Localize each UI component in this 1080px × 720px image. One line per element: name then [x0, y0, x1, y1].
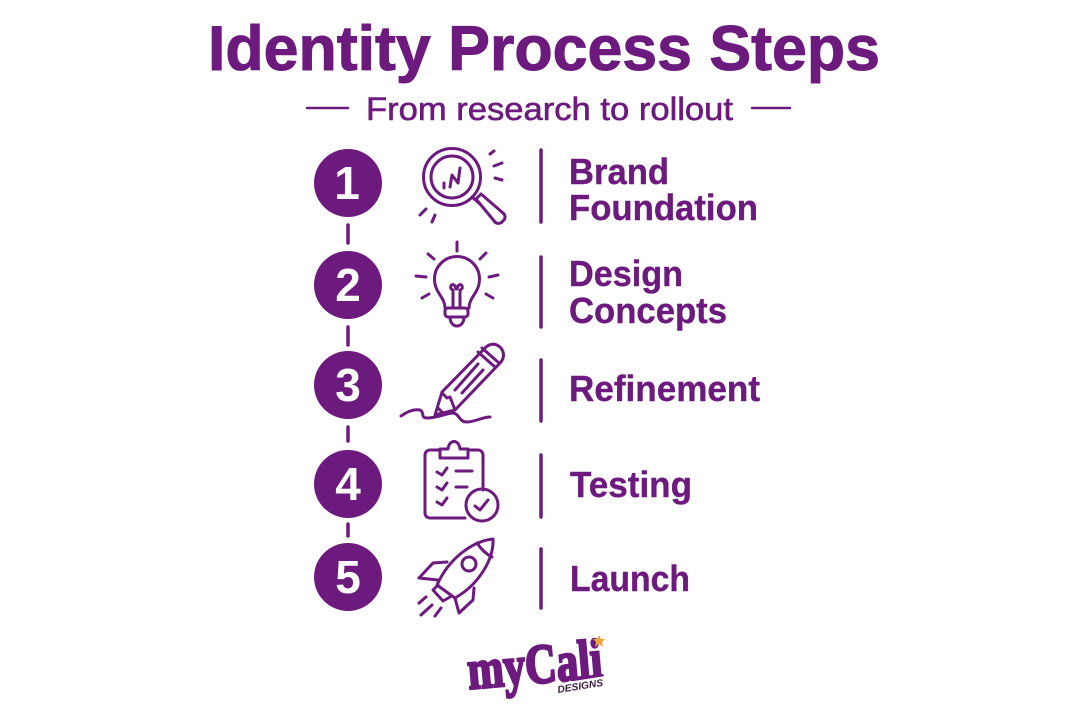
step 3 [314, 344, 760, 422]
divider [539, 360, 543, 421]
icon: light bulb [416, 242, 498, 326]
label: Brand Foundation [569, 151, 758, 228]
icon: pencil with squiggle [401, 344, 504, 422]
icon: star [593, 635, 605, 647]
number badge 4: 4 [335, 458, 361, 510]
label: Design Concepts [569, 253, 727, 331]
step 1 [314, 148, 758, 228]
logo: myCali Designs: myCali [465, 628, 605, 702]
icon: magnifying glass with chart [420, 148, 505, 223]
number badge 3 [314, 351, 382, 419]
number badge 2: 2 [335, 259, 361, 311]
number badge 2 [314, 251, 382, 319]
number badge 4 [314, 450, 382, 518]
divider [539, 257, 543, 327]
number badge 3: 3 [335, 359, 361, 411]
subtitle with side rules: From research to rollout [366, 91, 733, 127]
label: Design Concepts: Concepts [569, 290, 727, 331]
number badge 5 [314, 543, 382, 611]
step 4 [314, 442, 692, 521]
icon: rocket [419, 539, 493, 616]
label: Launch: Launch [570, 558, 690, 599]
divider [539, 455, 543, 517]
step 5 [314, 539, 690, 616]
number badge 1: 1 [334, 157, 360, 209]
label: Design Concepts: Design [569, 253, 683, 294]
label: Testing: Testing [570, 464, 692, 505]
label: Refinement: Refinement [569, 368, 760, 409]
title: Identity Process Steps [208, 14, 880, 84]
icon: clipboard checklist [425, 442, 498, 521]
divider [539, 549, 543, 608]
divider [539, 150, 543, 222]
timeline connectors [346, 225, 350, 536]
logo: myCali Designs: DESIGNS [557, 678, 604, 696]
number badge 5: 5 [335, 551, 361, 603]
step 2 [314, 242, 727, 331]
label: Brand Foundation: Brand [569, 151, 669, 192]
label: Brand Foundation: Foundation [569, 187, 758, 228]
number badge 1 [314, 149, 382, 217]
